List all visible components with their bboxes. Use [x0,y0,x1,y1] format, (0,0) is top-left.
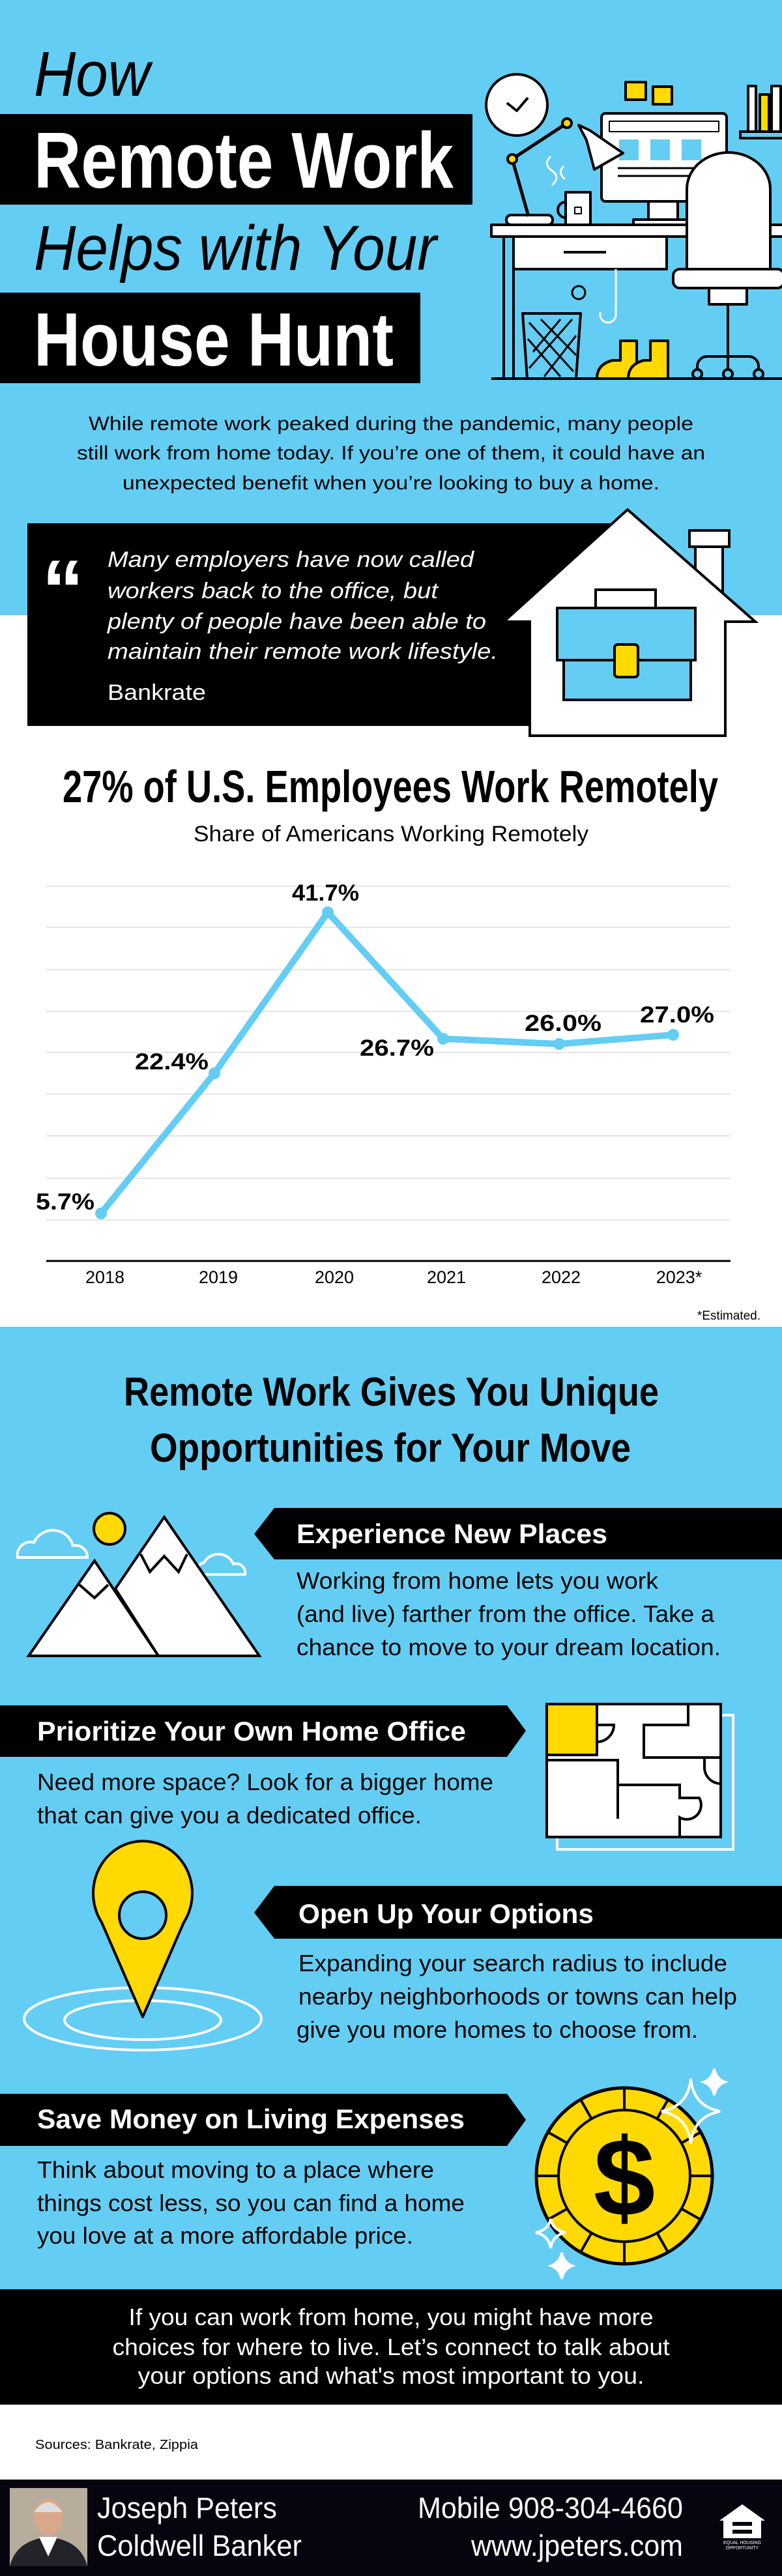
chart subtitle: Share of Americans Working Remotely [194,822,588,847]
line chart: 27.0% [640,1002,714,1028]
title: How [34,38,153,109]
icon: dollar coin [536,2069,725,2279]
icon: mug with steam [547,156,590,225]
intro paragraph: unexpected benefit when you’re looking to buy a home. [123,472,659,494]
icon: mountains [18,1513,259,1656]
sources: Sources: Bankrate, Zippia [35,2438,199,2452]
title: Helps with Your [34,212,439,283]
panel: open up your options: Open Up Your Options [298,1898,594,1929]
line chart: 26.0% [525,1011,601,1036]
intro paragraph: While remote work peaked during the pandemic, many people [89,413,693,435]
callout: closing message [0,2289,782,2405]
callout: closing message: choices for where to live. Let’s connect to talk about [112,2334,670,2360]
photo: agent [10,2488,87,2566]
intro paragraph: still work from home today. If you’re one of them, it could have an [77,442,705,464]
callout: closing message: If you can work from home, you might have more [129,2304,653,2330]
footer: Coldwell Banker [97,2529,302,2562]
panel: open up your options [254,1886,782,2043]
footer: Mobile 908-304-4660 [418,2491,683,2525]
icon: equal housing: OPPORTUNITY [726,2546,759,2551]
icon: sticky notes [626,82,672,104]
footer: Joseph Peters [97,2491,277,2525]
callout: closing message: your options and what's most important to you. [138,2362,644,2389]
panel: save money: Think about moving to a place where [37,2156,434,2183]
panel: experience new places: chance to move to your dream location. [297,1634,721,1660]
icon: dollar coin: $ [594,2116,655,2240]
panel: save money: Save Money on Living Expenses [37,2104,465,2134]
line chart: 2021 [427,1267,466,1287]
line chart: 2019 [199,1267,238,1287]
illustration: home office desk [486,74,782,379]
quote text: Many employers have now called [108,547,474,572]
title: House Hunt [34,297,394,382]
panel: save money: you love at a more affordable price. [37,2222,413,2249]
quote text [107,547,498,705]
icon: clock [486,74,547,136]
icon: equal housing [719,2504,765,2551]
line chart: 2022 [542,1267,581,1287]
icon: lamp [506,119,623,225]
title [0,38,472,383]
line chart: *Estimated. [697,1309,760,1323]
quote text: Bankrate [108,680,206,705]
line chart: 26.7% [360,1035,434,1061]
icon: house with briefcase [504,510,755,736]
panel: prioritize home office: Prioritize Your Own Home Office [37,1716,466,1746]
line chart: 2020 [315,1267,354,1287]
background blue top [0,0,782,615]
panel: experience new places: Experience New Places [297,1518,607,1549]
panel: save money: things cost less, so you can find a home [37,2190,465,2216]
line chart: 2023* [656,1267,702,1287]
panel: experience new places: Working from home lets you work [297,1567,659,1594]
panel: open up your options: nearby neighborhoods or towns can help [298,1983,737,2010]
panel: open up your options: Expanding your search radius to include [298,1950,727,1976]
panel: experience new places: (and live) farther from the office. Take a [297,1600,715,1627]
icon: quote mark: “ [42,542,84,637]
icon: floor plan [547,1704,733,1849]
quote text: workers back to the office, but [108,579,439,603]
icon: bookshelf [740,86,782,138]
icon: desk [491,225,782,379]
line chart: 22.4% [135,1049,209,1075]
panel: open up your options: give you more homes to choose from. [297,2016,698,2043]
section heading: Opportunities for Your Move [150,1426,631,1471]
icon: monitor [601,113,727,225]
line chart: 2018 [85,1267,124,1287]
icon: chair [673,152,782,379]
floor line [491,377,782,380]
section heading [124,1370,659,1471]
panel: prioritize home office: Need more space? Look for a bigger home [37,1769,493,1795]
icon: yellow boots [597,341,668,379]
footer: www.jpeters.com [471,2529,683,2562]
panel: prioritize home office [0,1705,526,1829]
panel: experience new places [254,1508,782,1660]
footer [0,2480,782,2576]
icon: sparkles [536,2069,725,2279]
panel: save money [0,2094,526,2249]
icon: trash can [523,313,581,379]
line chart: 5.7% [36,1189,94,1215]
title: Remote Work [34,116,454,205]
intro paragraph [77,413,705,494]
panel: quote [27,523,614,726]
panel: prioritize home office: that can give you a dedicated office. [37,1802,422,1829]
line chart: 41.7% [292,880,359,906]
icon: location pin [24,1841,261,2050]
quote text: maintain their remote work lifestyle. [108,639,498,664]
section heading: Remote Work Gives You Unique [124,1370,659,1415]
line chart [36,880,760,1323]
icon: equal housing: EQUAL HOUSING [723,2541,761,2545]
quote text: plenty of people have been able to [107,609,486,634]
